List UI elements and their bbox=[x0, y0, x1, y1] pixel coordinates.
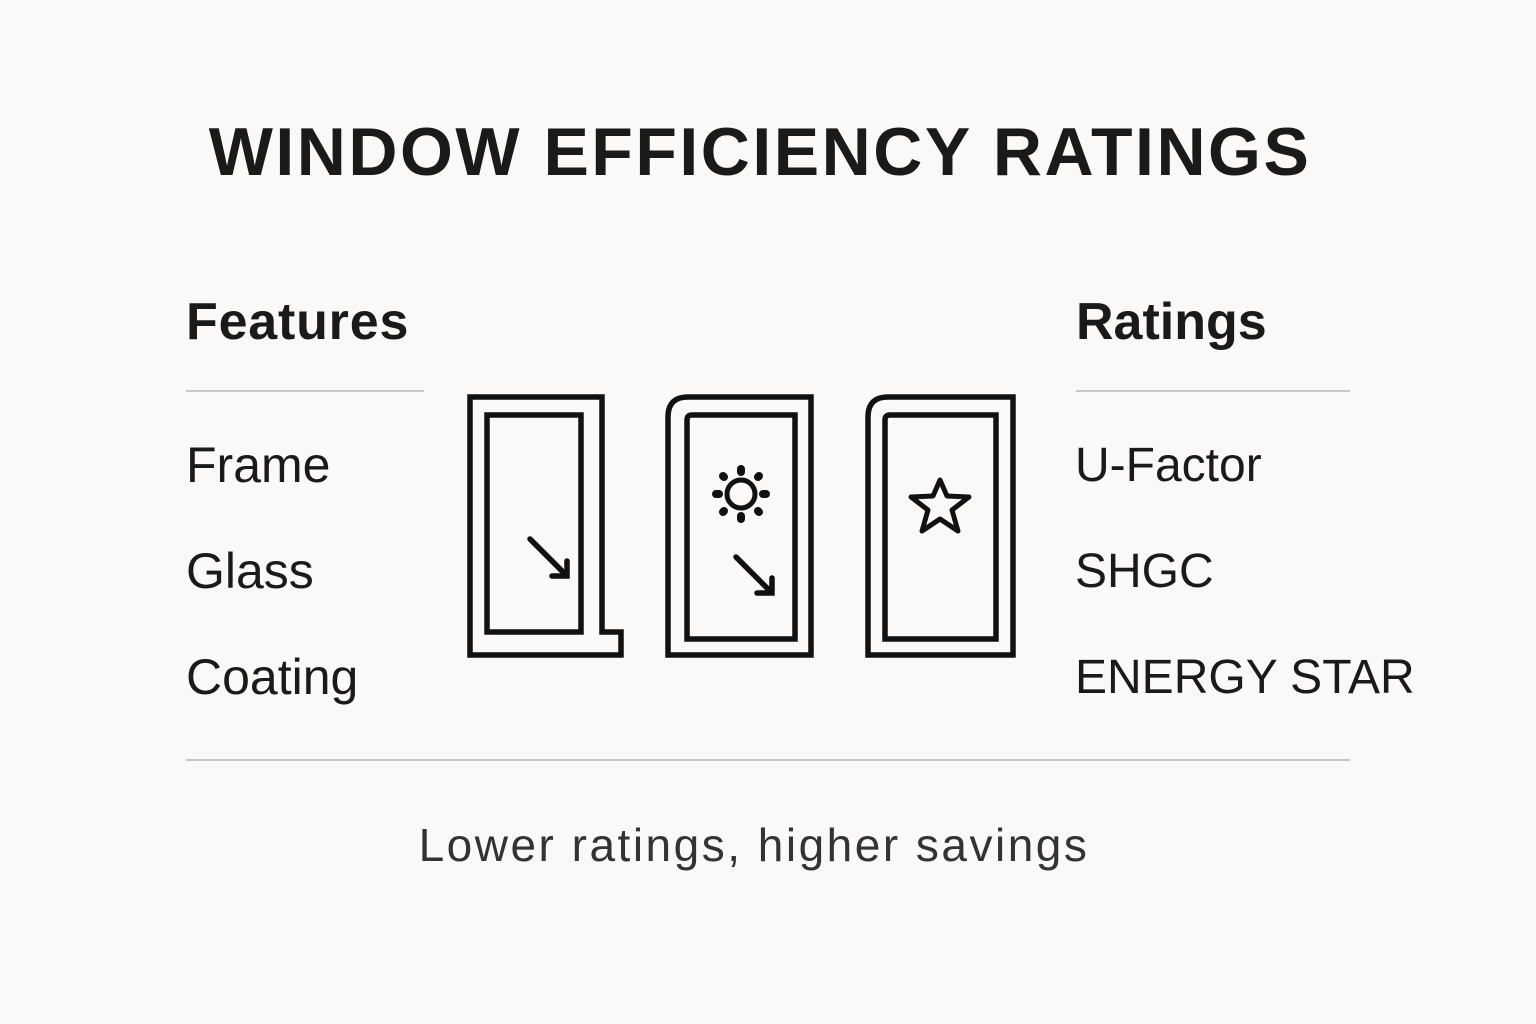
icon: window with sill bbox=[470, 397, 621, 655]
list: features: Coating bbox=[186, 649, 358, 705]
title: WINDOW EFFICIENCY RATINGS bbox=[209, 114, 1311, 190]
icon: window with sun bbox=[668, 397, 811, 655]
list: ratings: U-Factor bbox=[1075, 439, 1262, 492]
list: features: Frame bbox=[186, 437, 330, 493]
caption: Lower ratings, higher savings bbox=[419, 819, 1089, 871]
list: features: Glass bbox=[186, 543, 314, 599]
list: features bbox=[186, 437, 358, 705]
list: ratings: ENERGY STAR bbox=[1075, 651, 1415, 704]
list: ratings: SHGC bbox=[1075, 545, 1214, 598]
list: ratings bbox=[1075, 439, 1415, 704]
heading: ratings: Ratings bbox=[1076, 293, 1267, 351]
icon: window with star bbox=[868, 397, 1013, 655]
heading: features: Features bbox=[186, 293, 409, 351]
